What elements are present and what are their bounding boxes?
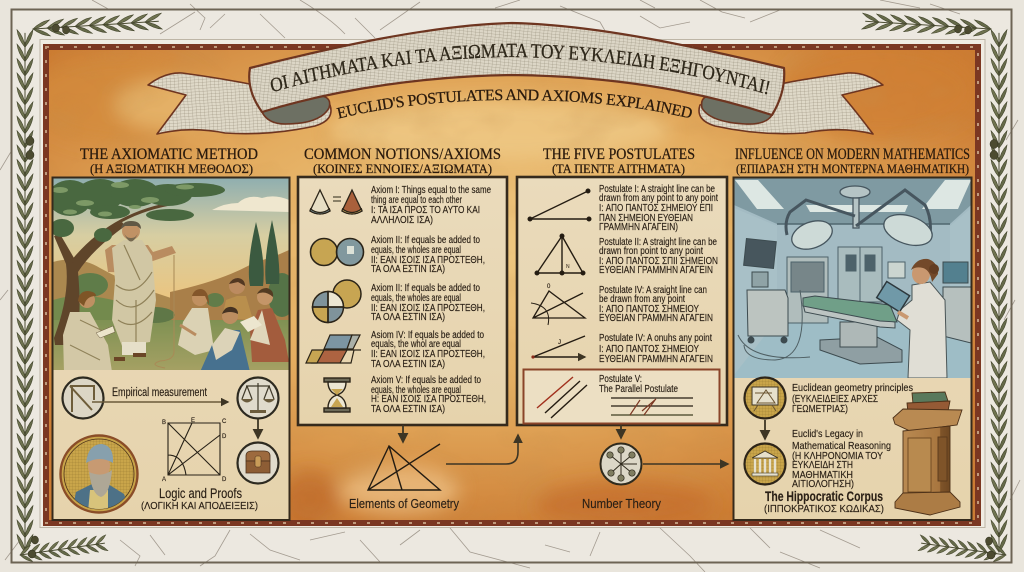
- icon: parallel lines: [537, 377, 587, 418]
- arrow: postulates to number theory: [620, 425, 622, 438]
- icon: treasure chest: [238, 442, 278, 484]
- heading: the axiomatic method: THE AXIOMATIC METHOD: [80, 146, 258, 163]
- text: axiom II: [371, 235, 485, 275]
- subtitle: EUCLID'S POSTULATES AND AXIOMS EXPLAINED: [336, 89, 692, 119]
- text: axiom IV: II: ΕΑΝ ΙΣΟΙΣ ΙΣΑ ΠΡΟΣΤΕΘΗ,: [371, 349, 485, 360]
- text: axiom III: equals, the wholes are equal: [371, 293, 461, 304]
- illustration: pedestal with books: [893, 392, 962, 515]
- icon: quartered circle with gold circle: [312, 280, 361, 322]
- banner tails: [148, 73, 883, 134]
- arrow: principles to legacy: [764, 420, 766, 439]
- icon: geometry easel medallion: [744, 378, 786, 418]
- icon: straight line between points: [528, 189, 591, 221]
- text: axiom II: ΤΑ ΟΛΑ ΕΣΤΙΝ ΙΣΑ): [371, 264, 445, 275]
- text: euclidean geometry principles: (ΕΥΚΛΕΙΔΕΙΕΣ ΑΡΧΕΣ: [792, 394, 878, 405]
- illustration: Euclid teaching under olive tree: [48, 177, 296, 372]
- banner title: ΟΙ ΑΙΤΗΜΑΤΑ ΚΑΙ ΤΑ ΑΞΙΩΜΑΤΑ ΤΟΥ ΕΥΚΛΕΙΔΗ ΕΞΗΓΟΥΝΤΑΙ!: [270, 44, 770, 94]
- icon: number theory network: [600, 444, 642, 484]
- text: euclid's legacy: Euclid's Legacy in: [792, 428, 863, 440]
- text: postulate I: ΠΑΝ ΣΗΜΕΙΟΝ ΕΥΘΕΙΑΝ: [599, 213, 693, 224]
- text: postulate IV: I: ΑΠΟ ΠΑΝΤΟΣ ΣΗΜΕΙΟΥ: [599, 344, 699, 355]
- panel: the axiomatic method: [48, 177, 296, 520]
- text: postulate IV: [599, 333, 713, 365]
- heading: the axiomatic method: [80, 146, 258, 176]
- icon: triangle with arc: [531, 284, 585, 325]
- text: postulate II: I: ΑΠΟ ΠΑΝΤΟΣ ΣΠΙΙ ΣΗΜΕΙΟΝ: [599, 256, 718, 267]
- text: postulate III: ΕΥΘΕΙΑΝ ΓΡΑΜΜΗΝ ΑΓΑΓΕΙΝ: [599, 313, 713, 324]
- text: axiom V: [371, 375, 486, 415]
- seated students: [63, 278, 289, 372]
- text: axiom I: ΑΛΛΗΛΟΙΣ ΙΣΑ): [371, 215, 433, 226]
- diagram: square proof with diagonals: B: [162, 420, 166, 426]
- panel: common notions and axioms: [298, 177, 507, 425]
- text: euclidean geometry principles: ΓΕΩΜΕΤΡΙΑΣ): [792, 404, 848, 415]
- icon: triangle with altitude: [535, 234, 585, 275]
- diagram: square proof with diagonals: [162, 418, 227, 483]
- arrow: scales to chest: [257, 419, 259, 438]
- text: euclid's legacy: ΕΥΚΛΕΙΔΗ ΣΤΗ: [792, 460, 853, 471]
- text: axiom III: Axiom II: If equals be added to: [371, 283, 480, 294]
- arrow: elements of geometry to postulates: [446, 435, 518, 464]
- icon: triangle with arc: 0: [547, 284, 551, 290]
- diagram: square proof with diagonals: D: [222, 434, 227, 440]
- text: euclid's legacy: Mathematical Reasoning: [792, 440, 891, 452]
- medical monitor and cart: [744, 239, 971, 343]
- text: postulate II: drawn fron point to any point: [599, 246, 703, 257]
- banner with Greek title: [147, 22, 884, 135]
- label: elements of geometry: Elements of Geometry: [349, 496, 459, 511]
- text: axiom II: II: ΕΑΝ ΙΣΟΙΣ ΙΣΑ ΠΡΟΣΤΕΘΗ,: [371, 255, 485, 266]
- text: postulate III: I: ΑΠΟ ΠΑΝΤΟΣ ΣΗΜΕΙΟΥ: [599, 304, 699, 315]
- diagram: square proof with diagonals: C: [222, 419, 227, 425]
- text: the hippocratic corpus: The Hippocratic Corpus: [765, 488, 883, 504]
- panel: influence on modern mathematics: [733, 177, 972, 520]
- text: euclidean geometry principles: [792, 382, 913, 415]
- text: axiom III: [371, 283, 485, 323]
- banner main ribbon: [249, 23, 784, 115]
- icon: overlapping circles: [310, 238, 364, 266]
- doctor with tablet: [877, 259, 947, 378]
- text: axiom IV: equals, the whol are equal: [371, 339, 461, 350]
- text: postulate II: ΕΥΘΕΙΑΝ ΓΡΑΜΜΗΝ ΑΓΑΓΕΙΝ: [599, 265, 713, 276]
- illustration: operating room: [734, 177, 971, 378]
- icon: hourglass: [324, 378, 350, 412]
- diagram: square proof with diagonals: D: [222, 477, 227, 483]
- text: postulate III: [599, 285, 713, 324]
- main orange panel: [30, 40, 980, 530]
- text: axiom III: ΤΑ ΟΛΑ ΕΣΤΙΝ ΙΣΑ): [371, 312, 445, 323]
- text: axiom IV: ΤΑ ΟΛΑ ΕΣΤΙΝ ΙΣΑ): [371, 359, 445, 370]
- text: euclidean geometry principles: Euclidean geometry principles: [792, 382, 913, 394]
- heading: the five postulates: THE FIVE POSTULATES: [543, 146, 695, 163]
- text: axiom II: Axiom II: If equals be added to: [371, 235, 480, 246]
- label: logic and proofs: (ΛΟΓΙΚΗ ΚΑΙ ΑΠΟΔΕΙΞΕΙΣ): [141, 501, 258, 512]
- text: axiom V: equals, the wholes are equal: [371, 385, 461, 396]
- surgical lamps: [786, 186, 936, 254]
- text: the hippocratic corpus: [764, 488, 884, 515]
- text: axiom I: thing are equal to each other: [371, 195, 462, 206]
- text: postulate I: drawn from any point to any point: [599, 193, 718, 204]
- text: parallel postulate: Postulate V:: [599, 374, 642, 385]
- arrow: number theory to modern mathematics: [643, 463, 728, 465]
- doors and cabinet: [787, 247, 905, 323]
- heading: the five postulates: (ΤΑ ΠΕΝΤΕ ΑΙΤΗΜΑΤΑ): [552, 161, 685, 176]
- heading: the five postulates: [543, 146, 695, 176]
- heading: common notions: [304, 146, 501, 176]
- teacher figure: [105, 221, 176, 368]
- icon: tiled parallelogram: [306, 335, 361, 363]
- panel: the five postulates: [517, 177, 727, 425]
- heading: common notions: COMMON NOTIONS/AXIOMS: [304, 146, 501, 163]
- heading: common notions: (ΚΟΙΝΕΣ ΕΝΝΟΙΕΣ/ΑΞΙΩΜΑΤΑ): [313, 161, 492, 176]
- icon: angle with arrow: [531, 336, 585, 359]
- text: axiom V: ΤΑ ΟΛΑ ΕΣΤΙΝ ΙΣΑ): [371, 404, 445, 415]
- icon: empirical measurement compass circle: [62, 378, 104, 418]
- text: axiom I: I: ΤΑ ΙΣΑ ΠΡΟΣ ΤΟ ΑΥΤΟ ΚΑΙ: [371, 205, 480, 216]
- text: parallel postulate: The Parallel Postulate: [599, 384, 678, 395]
- text: axiom V: Axiom V: If equals be added to: [371, 375, 481, 386]
- label: number theory: Number Theory: [582, 496, 661, 511]
- text: postulate II: Postulate II: A straight line can be: [599, 237, 717, 248]
- icon: temple medallion: [744, 444, 786, 484]
- label: empirical measurement: Empirical measurement: [112, 387, 208, 399]
- text: axiom I: Axiom I: Things equal to the same: [371, 185, 491, 196]
- icon: angle with arrow: J: [558, 340, 561, 346]
- text: axiom III: II: ΕΑΝ ΙΣΟΙΣ ΙΣΑ ΠΡΟΣΤΕΘΗ,: [371, 303, 485, 314]
- olive tree: [48, 179, 225, 345]
- icon: triangle with altitude: N: [566, 264, 570, 270]
- text: postulate II: [599, 237, 718, 276]
- diagram: triangle elements of geometry: [368, 444, 440, 490]
- text: postulate I: [599, 184, 718, 233]
- arrow: measurement to scales: [92, 401, 228, 403]
- heading: influence on modern mathematics: (ΕΠΙΔΡΑΣΗ ΣΤΗ ΜΟΝΤΕΡΝΑ ΜΑΘΗΜΑΤΙΚΗ): [736, 161, 969, 176]
- portrait medallion of Euclid: [60, 436, 138, 512]
- text: postulate I: ΓΡΑΜΜΗΝ ΑΓΑΓΕΙΝ): [599, 222, 678, 233]
- callout: postulate V parallel postulate: [524, 370, 720, 424]
- text: postulate IV: ΕΥΘΕΙΑΝ ΓΡΑΜΜΗΝ ΑΓΑΓΕΙΝ: [599, 354, 713, 365]
- heading: the axiomatic method: (Η ΑΞΙΩΜΑΤΙΚΗ ΜΕΘΟΔΟΣ): [90, 161, 253, 176]
- arrow: axioms to elements of geometry: [402, 425, 404, 442]
- text: euclid's legacy: ΑΙΤΙΟΛΟΓΗΣΗ): [792, 479, 854, 490]
- text: postulate III: be drawn from any point: [599, 294, 685, 305]
- text: axiom IV: [371, 330, 485, 370]
- text: postulate I: Postulate I: A straight line can be: [599, 184, 715, 195]
- heading: influence on modern mathematics: [735, 146, 970, 176]
- diagram: square proof with diagonals: E: [191, 418, 195, 424]
- icon: parallels with transversals: [611, 398, 693, 415]
- icon: scales of justice: [238, 378, 278, 418]
- text: euclid's legacy: (Η ΚΛΗΡΟΝΟΜΙΑ ΤΟΥ: [792, 451, 883, 462]
- text: axiom V: Η: ΕΑΝ ΙΣΟΙΣ ΙΣΑ ΠΡΟΣΤΕΘΗ,: [371, 394, 486, 405]
- text: postulate III: Postulate IV: A sraight line can: [599, 285, 707, 296]
- text: postulate IV: Postulate IV: A onuhs any point: [599, 333, 712, 344]
- operating table: [803, 296, 902, 364]
- label: logic and proofs: [141, 486, 258, 512]
- text: euclid's legacy: [792, 428, 891, 490]
- icon: equal cones: [310, 190, 362, 214]
- text: axiom II: equals, the wholes are equal: [371, 245, 461, 256]
- text: axiom I: [371, 185, 491, 226]
- text: the hippocratic corpus: (ΙΠΠΟΚΡΑΤΙΚΟΣ ΚΩΔΙΚΑΣ): [764, 503, 884, 515]
- text: axiom IV: Asiom IV: If equals be added to: [371, 330, 484, 341]
- text: postulate I: I: ΑΠΟ ΠΑΝΤΟΣ ΣΗΜΕΙΟΥ ΕΠΙ: [599, 203, 713, 214]
- diagram: square proof with diagonals: A: [162, 477, 166, 483]
- text: parallel postulate: [599, 374, 678, 395]
- text: euclid's legacy: ΜΑΘΗΜΑΤΙΚΗ: [792, 470, 853, 481]
- label: logic and proofs: Logic and Proofs: [159, 486, 242, 501]
